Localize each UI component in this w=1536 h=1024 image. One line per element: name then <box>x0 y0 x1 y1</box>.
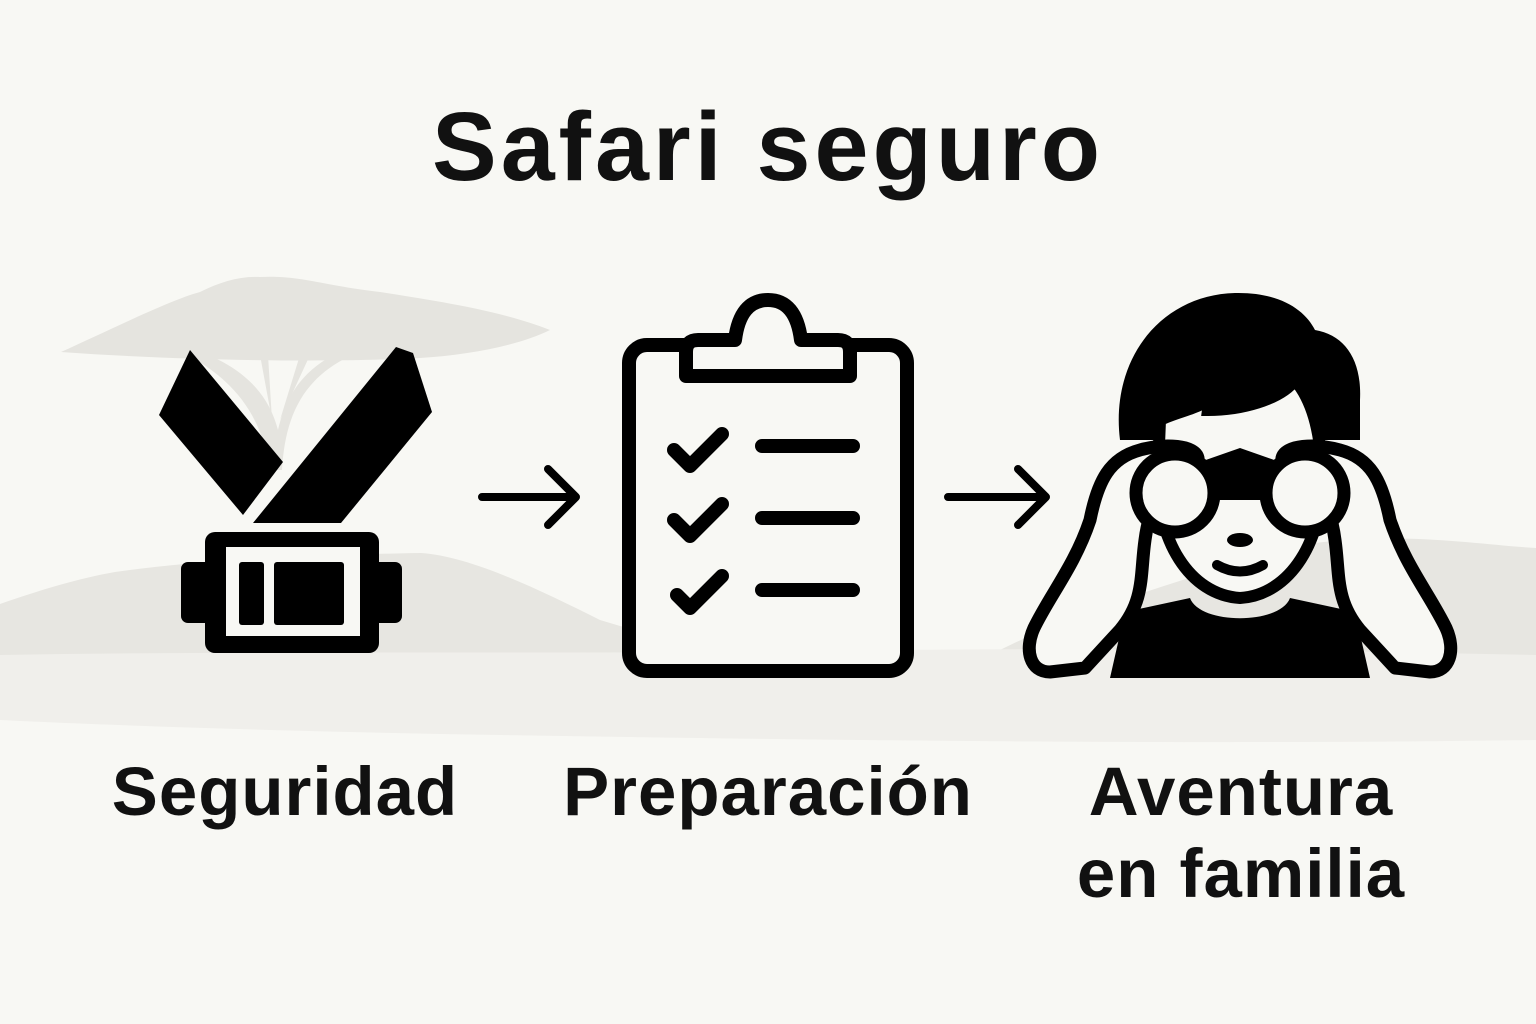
left hand <box>1029 446 1198 672</box>
label: Seguridad: Seguridad <box>112 753 458 830</box>
label: Aventura en familia: Aventura <box>1089 753 1393 830</box>
label: Aventura en familia: en familia <box>1077 835 1405 912</box>
arrow 2 <box>948 469 1046 525</box>
icon: seatbelt <box>159 347 432 653</box>
shirt <box>1110 598 1370 678</box>
background: savanna hills <box>0 538 1536 742</box>
arrow 1 <box>482 469 576 525</box>
right hand <box>1282 446 1451 672</box>
icon: child with binoculars <box>1029 293 1451 678</box>
binocular bridge <box>1190 448 1290 500</box>
label: Preparación: Preparación <box>563 753 973 830</box>
icon: clipboard checklist <box>629 300 907 671</box>
lenses <box>1136 454 1214 532</box>
background: acacia tree <box>61 277 550 470</box>
mouth and nose <box>1217 565 1263 572</box>
hair <box>1119 293 1360 440</box>
title: Safari seguro <box>432 92 1104 201</box>
face <box>1158 380 1322 598</box>
